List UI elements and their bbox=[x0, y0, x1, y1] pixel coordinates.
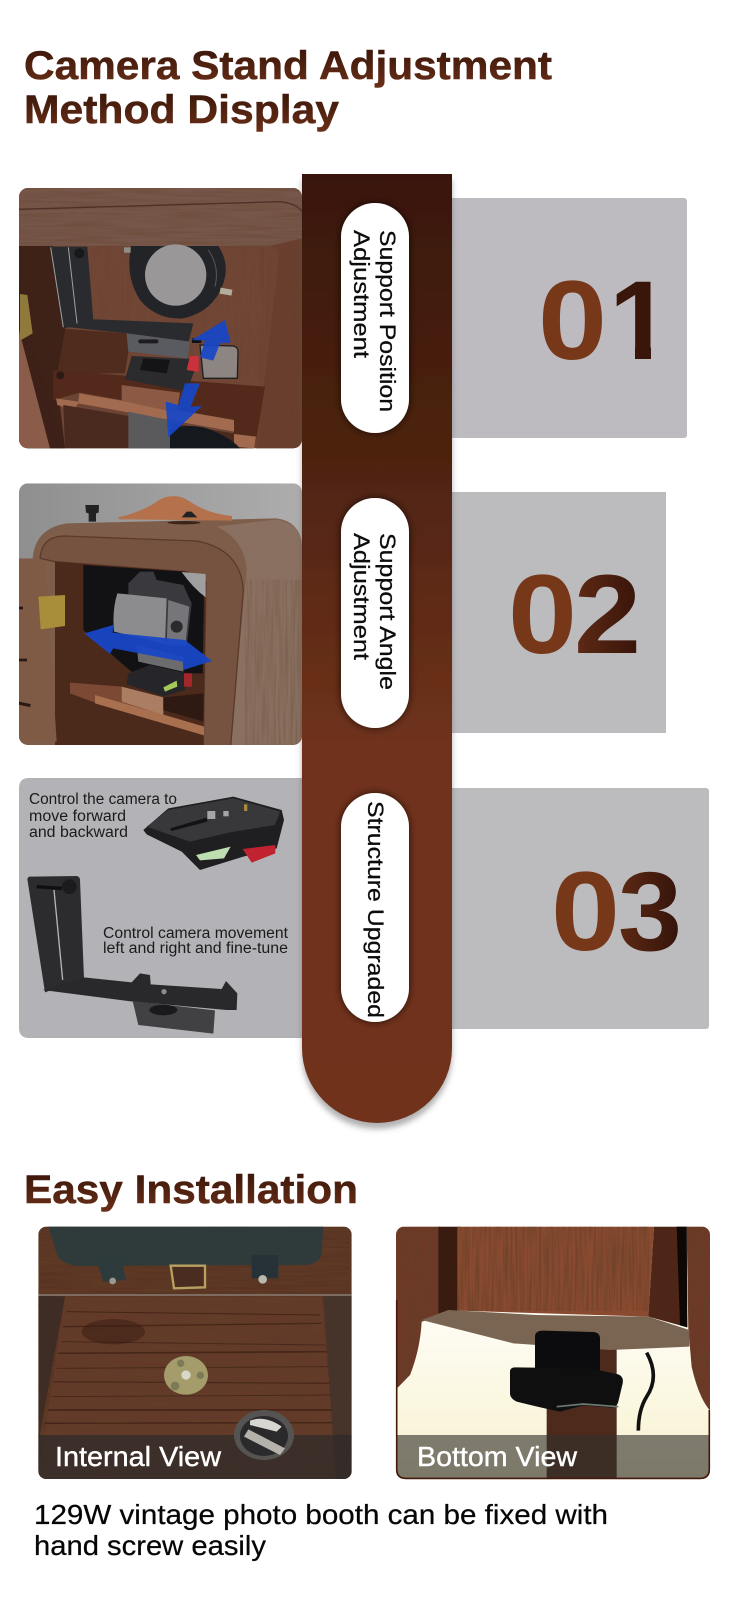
slider and plate bbox=[63, 319, 201, 392]
panel: number 01 bbox=[440, 198, 687, 438]
mount block bbox=[122, 385, 180, 413]
mounting disc bbox=[164, 1356, 208, 1395]
grey paper bbox=[200, 345, 238, 378]
photo: support position adjustment bbox=[19, 188, 302, 448]
number 02: 0 bbox=[508, 552, 577, 677]
caption band bbox=[38, 1435, 352, 1479]
hand screw bbox=[234, 1410, 294, 1460]
curved metal brace bbox=[638, 1353, 653, 1431]
interior bbox=[55, 562, 206, 747]
photo: internal view bbox=[38, 1227, 352, 1480]
lower items bbox=[128, 412, 172, 448]
inner frame bbox=[40, 536, 243, 747]
right frame bbox=[256, 238, 302, 448]
photo: support angle adjustment bbox=[18, 483, 302, 747]
title bbox=[24, 44, 552, 132]
title: Method Display bbox=[24, 88, 340, 132]
knobs bbox=[85, 505, 201, 524]
heading: easy installation: Easy Installation bbox=[24, 1168, 358, 1212]
label: forward and backward: Control the camera to bbox=[29, 791, 177, 808]
number 01: 1 bbox=[609, 258, 671, 383]
icon: blue down arrow bbox=[166, 383, 202, 437]
number 03: 3 bbox=[618, 849, 682, 974]
pill: support position adjustment bbox=[341, 203, 409, 433]
pill: support angle adjustment: Support Angle bbox=[375, 533, 400, 690]
description text: 129W vintage photo booth can be fixed with bbox=[34, 1499, 608, 1530]
quick-release plate bbox=[143, 797, 284, 870]
L bracket bbox=[27, 876, 237, 1034]
shelf bbox=[70, 683, 204, 735]
back wall bbox=[20, 246, 278, 387]
number 01 bbox=[538, 258, 673, 383]
number 01: 0 bbox=[538, 258, 607, 383]
number 03: 0 bbox=[551, 849, 620, 974]
description text bbox=[34, 1499, 608, 1561]
handle bbox=[118, 496, 232, 521]
door bbox=[19, 330, 52, 448]
dark stain on floor bbox=[82, 1319, 145, 1344]
number 02 bbox=[508, 552, 641, 677]
caption: internal view: Internal View bbox=[55, 1441, 222, 1472]
plate bbox=[127, 665, 192, 697]
title: Camera Stand Adjustment bbox=[24, 44, 552, 88]
shelf bbox=[53, 370, 265, 448]
photo: bottom view bbox=[396, 1227, 710, 1480]
bracket upright bbox=[50, 247, 93, 329]
pill: support position adjustment: Adjustment bbox=[349, 230, 374, 359]
ring light bbox=[124, 244, 232, 318]
number 02: 2 bbox=[574, 552, 641, 677]
pill: structure upgraded: Structure Upgraded bbox=[363, 801, 388, 1018]
cabinet body bbox=[19, 518, 302, 747]
number 03 bbox=[551, 849, 682, 974]
pill: support position adjustment: Support Position bbox=[375, 230, 400, 412]
label: left and right: left and right and fine-tune bbox=[103, 940, 288, 957]
pill: structure upgraded bbox=[341, 793, 409, 1022]
icon: blue up arrow bbox=[192, 320, 231, 361]
panel: number 02 bbox=[440, 492, 666, 733]
central wood bbox=[438, 1227, 460, 1317]
photo border bbox=[397, 1300, 709, 1478]
description text: hand screw easily bbox=[34, 1530, 266, 1561]
left interior bbox=[19, 246, 65, 448]
side walls bbox=[38, 1295, 65, 1480]
camera bbox=[113, 572, 192, 647]
hinge bbox=[20, 294, 33, 341]
hand knob bbox=[510, 1331, 623, 1412]
slider bbox=[138, 653, 184, 672]
hinge bbox=[38, 595, 65, 629]
pill: support angle adjustment: Adjustment bbox=[349, 533, 374, 661]
caption band bbox=[396, 1435, 710, 1479]
caption: bottom view: Bottom View bbox=[417, 1441, 578, 1472]
label: left and right: Control camera movement bbox=[103, 925, 289, 942]
central column bbox=[302, 174, 452, 1123]
label: forward and backward bbox=[29, 791, 177, 841]
label: left and right bbox=[103, 925, 289, 957]
panel: number 03 bbox=[440, 788, 709, 1029]
door bbox=[19, 717, 57, 742]
base plate bbox=[422, 1310, 689, 1350]
shaded wall behind shelf bbox=[55, 329, 128, 373]
top frame of cabinet bbox=[19, 188, 302, 246]
wood floor bbox=[38, 1297, 337, 1480]
panel: structure upgraded photo bbox=[19, 778, 302, 1038]
pole bbox=[547, 1347, 617, 1480]
icon: blue double arrow bbox=[84, 625, 212, 670]
label: forward and backward: move forward bbox=[29, 808, 126, 825]
dark panel and clips bbox=[48, 1227, 323, 1288]
wood legs bbox=[396, 1227, 710, 1412]
pill: support angle adjustment bbox=[341, 498, 409, 728]
label: forward and backward: and backward bbox=[29, 824, 128, 841]
